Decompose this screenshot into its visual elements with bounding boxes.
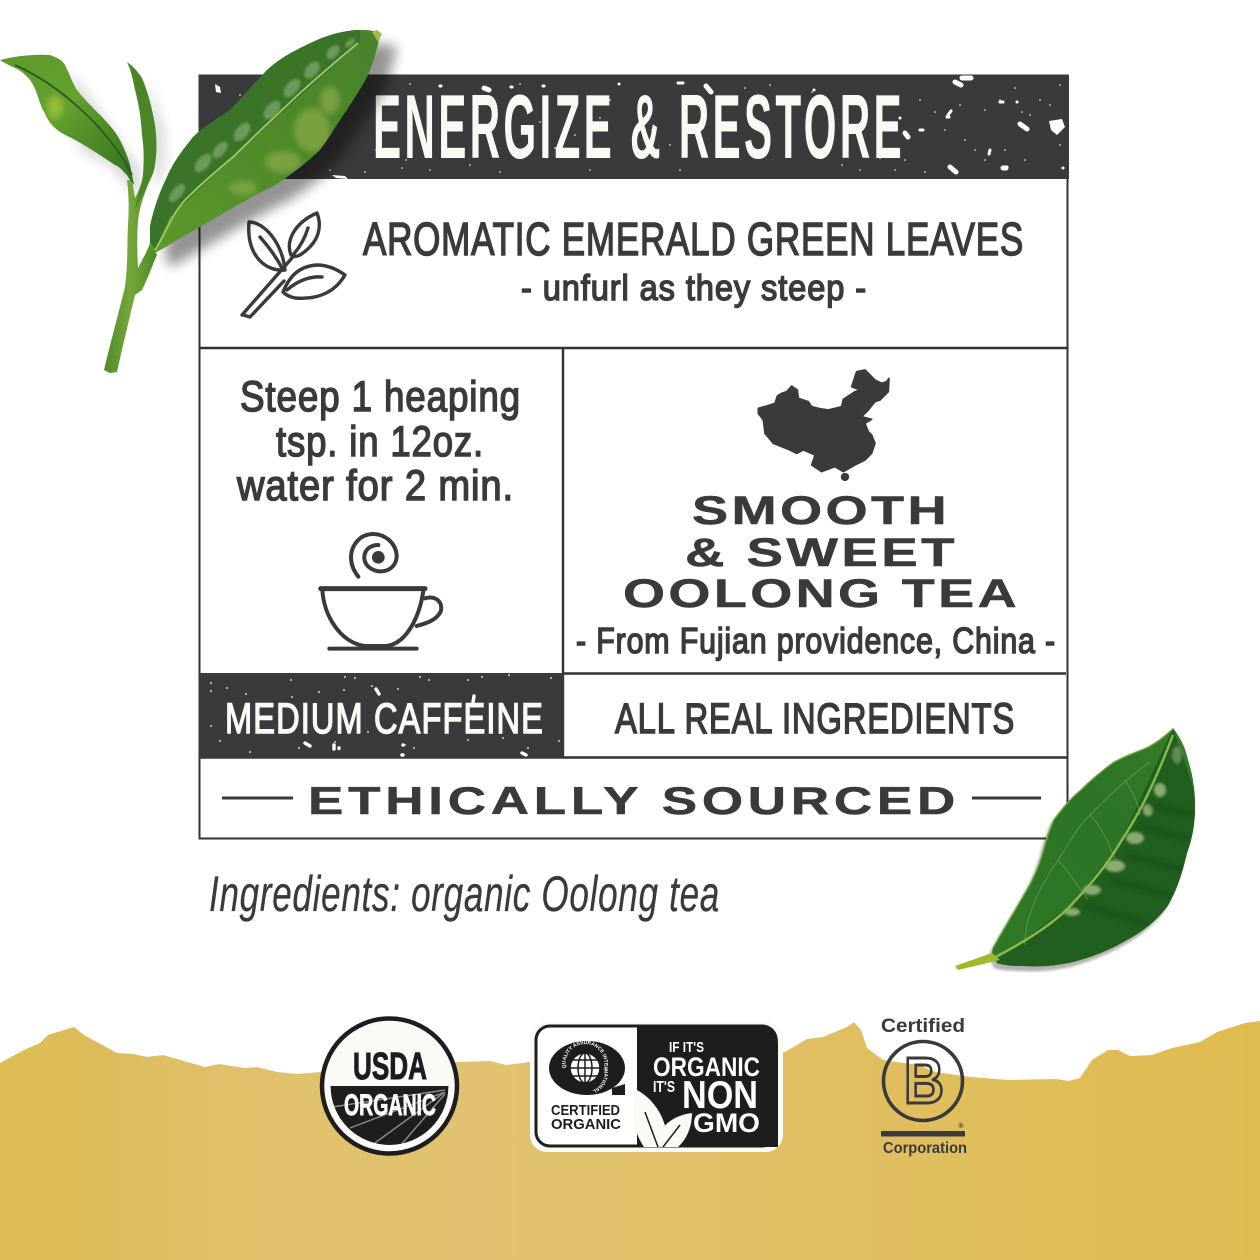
main information panel bbox=[199, 75, 1069, 838]
icon: quality assurance globe: QUALITY ASSURANCE INTERNATIONAL bbox=[562, 1041, 608, 1093]
badge: quality assurance international and non-GMO: CERTIFIED bbox=[551, 1102, 620, 1119]
badge: USDA organic bbox=[322, 1018, 457, 1154]
badge: medium caffeine: MEDIUM CAFFEINE bbox=[225, 695, 544, 743]
non-GMO wording bbox=[653, 1039, 760, 1138]
non-GMO wording: NON bbox=[682, 1074, 758, 1117]
veins bbox=[1025, 762, 1150, 945]
text: aromatic leaves: - unfurl as they steep - bbox=[521, 267, 867, 308]
text: aromatic leaves bbox=[363, 213, 1024, 308]
non-GMO wording: IF IT'S bbox=[669, 1039, 704, 1056]
non-GMO wording: ORGANIC bbox=[653, 1052, 760, 1082]
big leaf bbox=[140, 20, 381, 253]
badge: certified B corporation: ® bbox=[958, 1122, 964, 1130]
leaf edge bbox=[993, 728, 1173, 947]
text: aromatic leaves: AROMATIC EMERALD GREEN LEAVES bbox=[363, 213, 1024, 265]
dark field segment bbox=[330, 1086, 448, 1145]
upper half darker bbox=[140, 20, 360, 250]
text: smooth and sweet oolong tea: SMOOTH bbox=[692, 489, 950, 533]
header band bbox=[199, 75, 1069, 179]
leaf shadow bbox=[989, 733, 1192, 971]
tea leaf photo, bottom right bbox=[950, 720, 1200, 971]
icon: steaming tea cup bbox=[321, 534, 441, 649]
text: smooth and sweet oolong tea bbox=[576, 489, 1056, 661]
text: smooth and sweet oolong tea: & SWEET bbox=[685, 531, 958, 575]
yellow torn paper band bbox=[0, 1021, 1260, 1260]
badge: quality assurance international and non-GMO bbox=[530, 1022, 783, 1152]
stem bbox=[104, 178, 157, 373]
header speckles bbox=[215, 78, 1065, 179]
text: steeping instructions: Steep 1 heaping bbox=[240, 373, 521, 421]
sprig shadow bbox=[70, 44, 397, 267]
icon: white leaves bbox=[633, 1090, 692, 1147]
leaf stalk bbox=[955, 953, 1000, 970]
text: smooth and sweet oolong tea: OOLONG TEA bbox=[623, 572, 1020, 616]
non-GMO wording: IT'S bbox=[653, 1079, 675, 1096]
non-GMO wording: GMO bbox=[693, 1108, 760, 1138]
midrib bbox=[993, 735, 1173, 958]
text: steeping instructions: tsp. in 12oz. bbox=[276, 418, 484, 466]
middle small leaf bbox=[127, 62, 156, 210]
icon: tea leaves bbox=[242, 213, 345, 317]
ingredients line: Ingredients: organic Oolong tea bbox=[209, 866, 720, 922]
text: all real ingredients: ALL REAL INGREDIENTS bbox=[615, 695, 1015, 743]
icon: quality assurance globe bbox=[549, 1041, 625, 1095]
icon: map of China bbox=[758, 370, 889, 480]
panel outline bbox=[200, 76, 1068, 838]
blistered ridges bbox=[166, 37, 357, 205]
badge: certified B corporation bbox=[881, 1016, 967, 1157]
lower half darker bbox=[990, 728, 1200, 970]
pale highlights along the midrib bbox=[1064, 746, 1182, 916]
badge: quality assurance international and non-GMO: ORGANIC bbox=[551, 1116, 621, 1133]
pale patches on the lower half bbox=[229, 86, 340, 195]
badge: medium caffeine bbox=[199, 673, 564, 758]
left leaf bbox=[0, 55, 134, 185]
badge: certified B corporation: B bbox=[904, 1044, 944, 1117]
badge: certified B corporation: Corporation bbox=[883, 1140, 967, 1157]
text: steeping instructions: water for 2 min. bbox=[236, 462, 514, 510]
badge: USDA organic: USDA bbox=[353, 1046, 427, 1088]
text: ethically sourced: ETHICALLY SOURCED bbox=[308, 780, 960, 823]
text: steeping instructions bbox=[236, 373, 521, 510]
badge: USDA organic: ORGANIC bbox=[344, 1089, 436, 1122]
leaf blade bbox=[992, 728, 1195, 966]
lateral ribs bbox=[1085, 805, 1195, 925]
tea sprig photo, top left bbox=[0, 20, 397, 373]
row divider and column lines bbox=[199, 348, 1068, 758]
text: smooth and sweet oolong tea: - From Fujian providence, China - bbox=[576, 620, 1056, 661]
badge: certified B corporation: Certified bbox=[881, 1016, 965, 1037]
